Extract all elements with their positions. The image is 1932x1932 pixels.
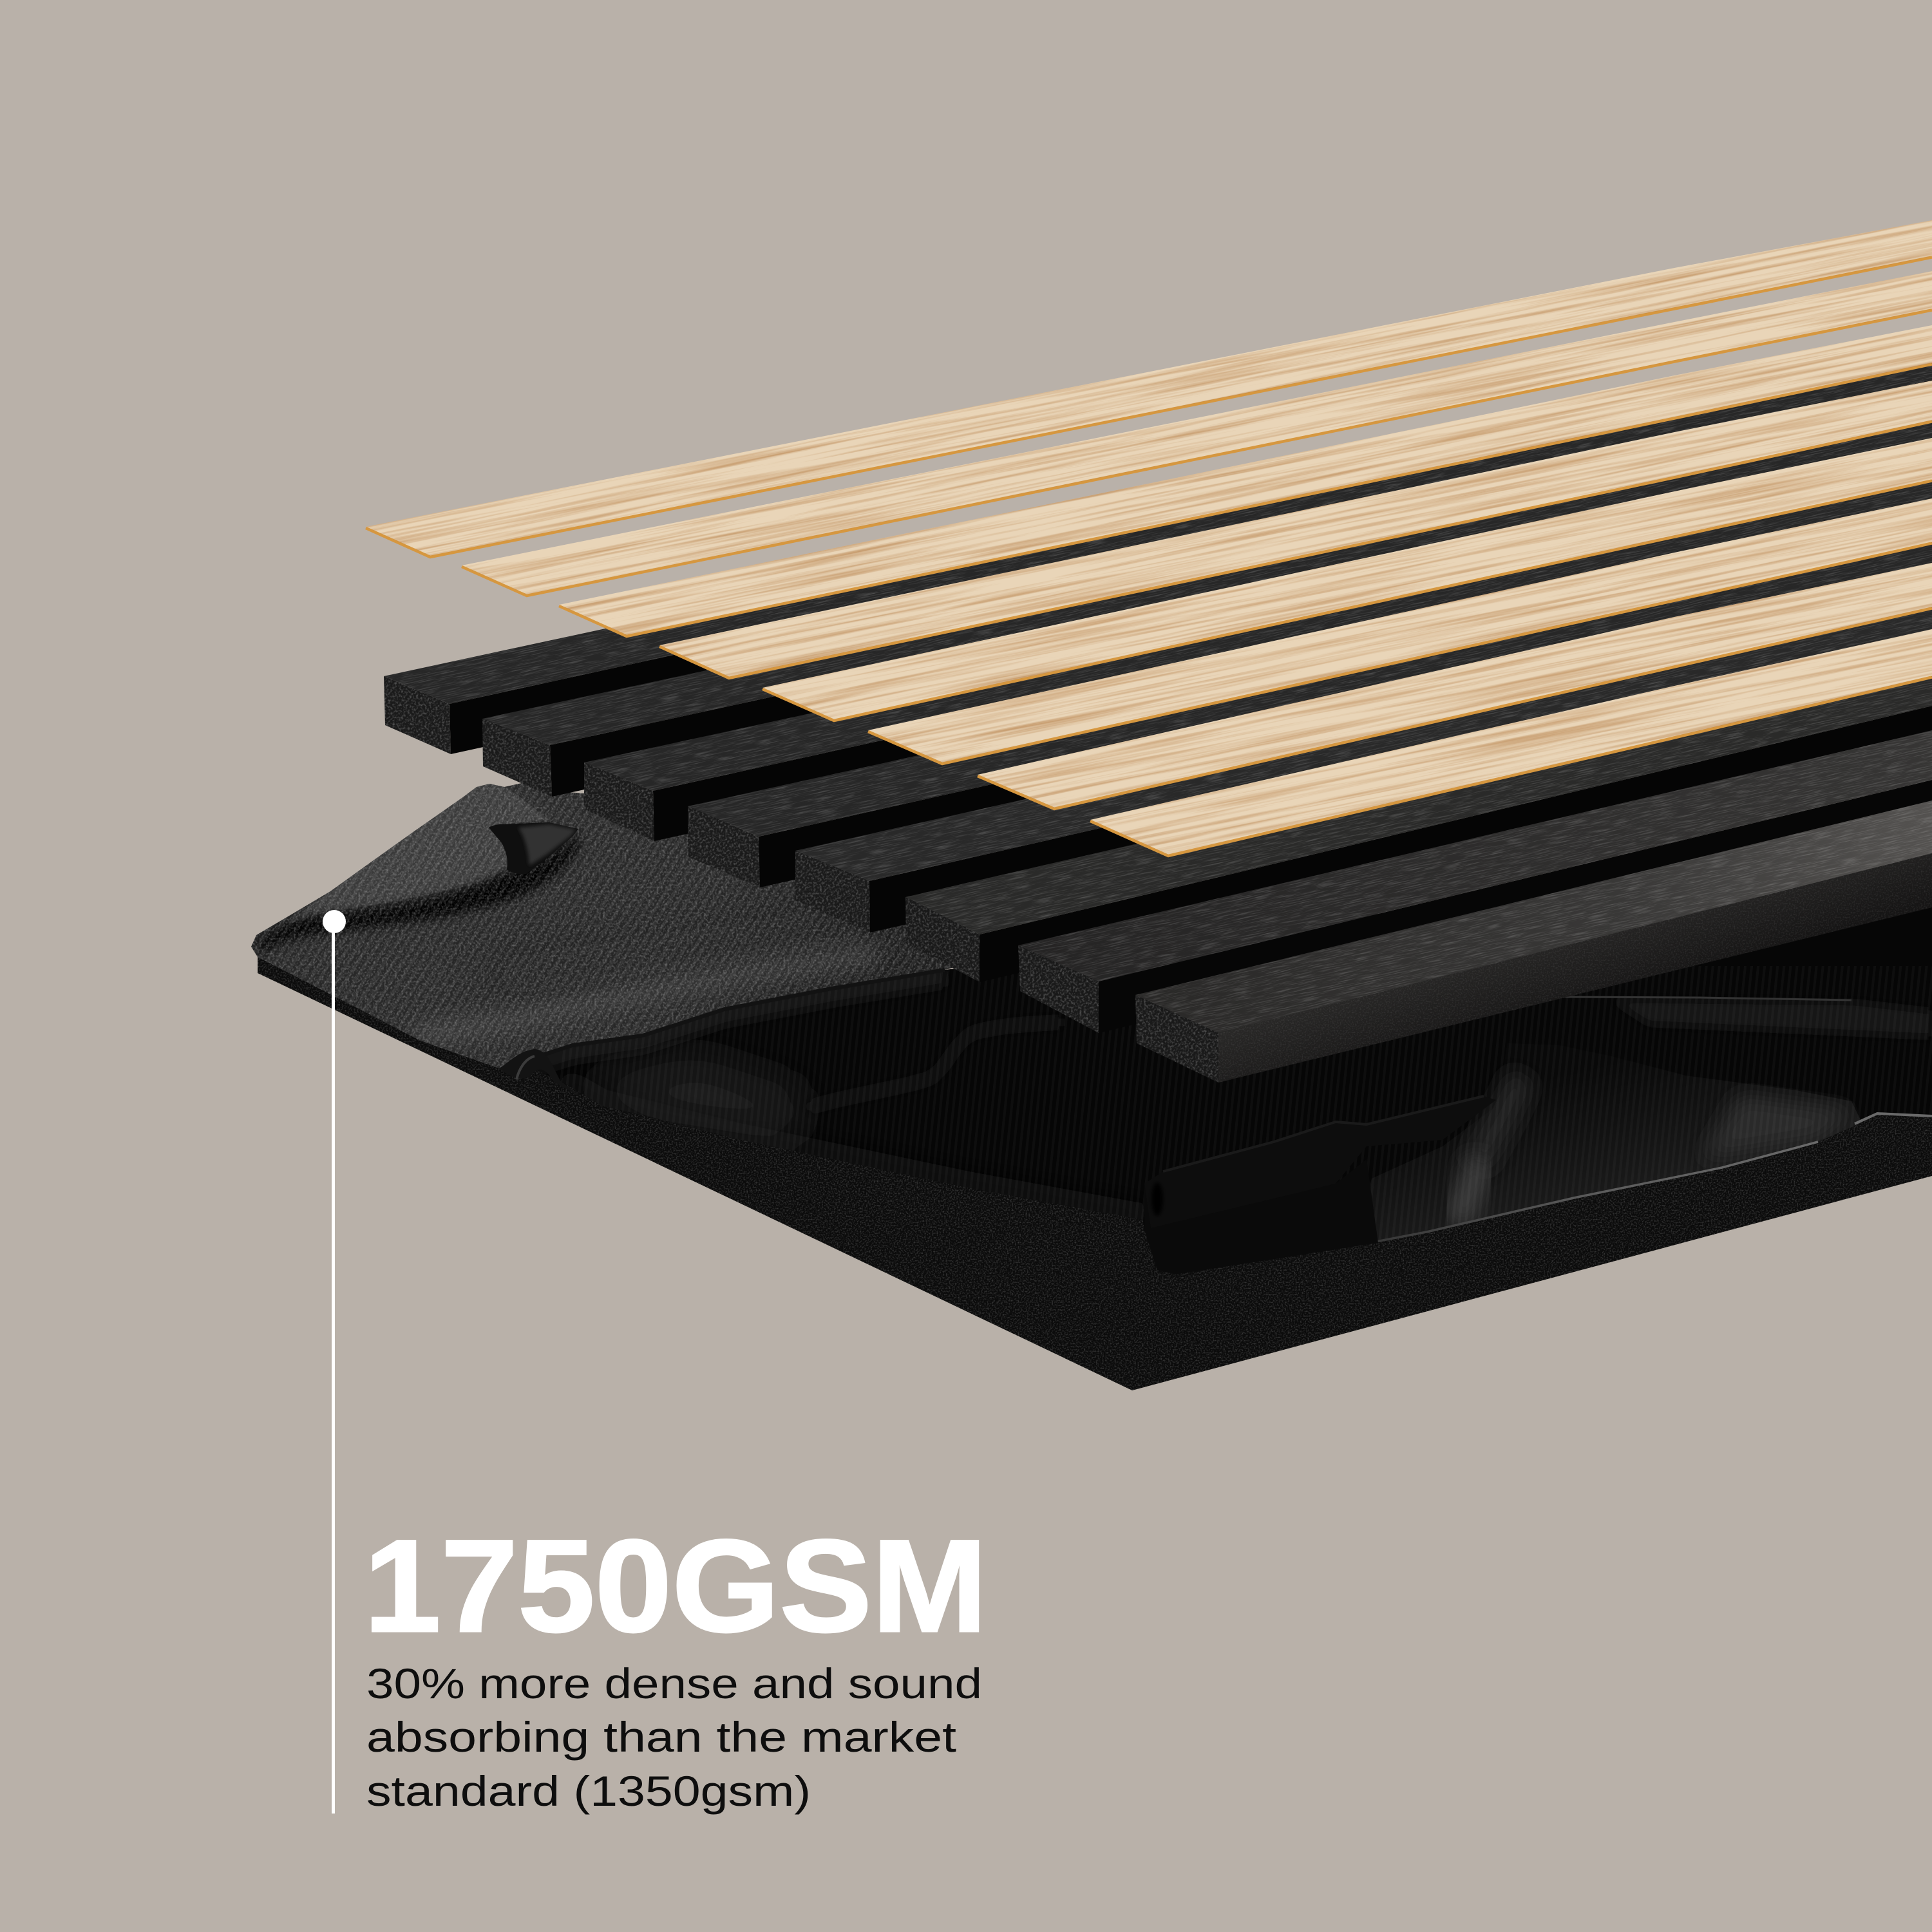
flap lit surface	[285, 784, 549, 924]
panel: black felt battens	[272, 249, 1932, 1269]
fold top edge	[1163, 1096, 1484, 1171]
fabric shading	[519, 966, 1932, 1275]
description line 2: absorbing than the market	[366, 1713, 956, 1761]
rear fold soft light	[1610, 999, 1932, 1037]
batten 2	[482, 406, 1932, 797]
slat 6	[868, 498, 1932, 764]
slat 4	[659, 381, 1932, 678]
fabric tail below fold	[1144, 1159, 1378, 1274]
front left lit patch	[601, 1060, 795, 1136]
rolled fabric fold	[1144, 1096, 1496, 1228]
felt board shape	[258, 955, 1932, 1390]
fabric hem highlight	[1352, 1142, 1818, 1246]
description line 1: 30% more dense and sound	[366, 1660, 982, 1707]
velvety front fold edge	[519, 970, 945, 1063]
soft ridge	[809, 1022, 1062, 1108]
flap tip lit side	[518, 824, 576, 866]
cloth shading and texture	[248, 779, 969, 1075]
batten 8	[1135, 800, 1932, 1083]
cloth shape	[251, 783, 966, 1068]
slat 8	[1090, 629, 1932, 856]
description line 3: standard (1350gsm)	[366, 1767, 811, 1815]
panel: dark fabric in shadow under the slats	[519, 837, 1932, 1275]
leader line	[332, 922, 335, 1814]
slat 7	[978, 563, 1932, 809]
long wrinkle highlight	[412, 952, 876, 1037]
text block: description	[366, 1660, 982, 1815]
leader dot	[323, 910, 346, 933]
shadow under flap	[256, 834, 580, 953]
slat 1	[366, 220, 1932, 557]
batten top grain	[272, 249, 1932, 1269]
wrinkle shade	[489, 921, 876, 979]
cloth weave	[248, 779, 969, 1075]
cloth speckle	[248, 779, 969, 1075]
batten end speckle	[380, 673, 1224, 1085]
shadowed fabric shape	[519, 837, 1932, 1274]
fold opening shadow	[1151, 1182, 1163, 1216]
batten 7	[1018, 730, 1932, 1033]
panel: oak veneer slats	[129, 0, 1932, 1084]
right corner lit patch	[1700, 1095, 1855, 1159]
slat 5	[762, 438, 1932, 721]
front fold band	[519, 976, 945, 1069]
light streak lower	[1457, 1159, 1481, 1224]
upper fold highlight	[1563, 997, 1852, 1000]
front pleat	[499, 1049, 580, 1096]
batten 5	[795, 596, 1932, 933]
right lit cloth	[1370, 1078, 1862, 1240]
batten 3	[584, 470, 1932, 841]
oak grain	[129, 0, 1932, 1084]
batten 6	[905, 660, 1932, 982]
panel: fabric cover upper layer with curled corner	[248, 779, 969, 1096]
felt board speckle texture	[251, 947, 1932, 1397]
rib overlay	[560, 966, 1932, 1275]
batten 1	[384, 343, 1932, 754]
callout: leader line and dot	[323, 910, 346, 1814]
panel: acoustic felt base board	[251, 947, 1932, 1397]
slat 2	[462, 271, 1932, 596]
heading: 1750GSM: 1750GSM	[364, 1513, 987, 1660]
pleat highlight	[516, 1056, 535, 1079]
slat 3	[559, 325, 1932, 636]
batten side grain	[1211, 850, 1932, 1088]
soft edge against the board	[560, 1082, 1143, 1220]
batten 4	[688, 531, 1932, 887]
fabric corner highlight	[1855, 1113, 1932, 1124]
curled flap tip	[489, 822, 578, 874]
light streak upper	[1475, 1075, 1523, 1166]
